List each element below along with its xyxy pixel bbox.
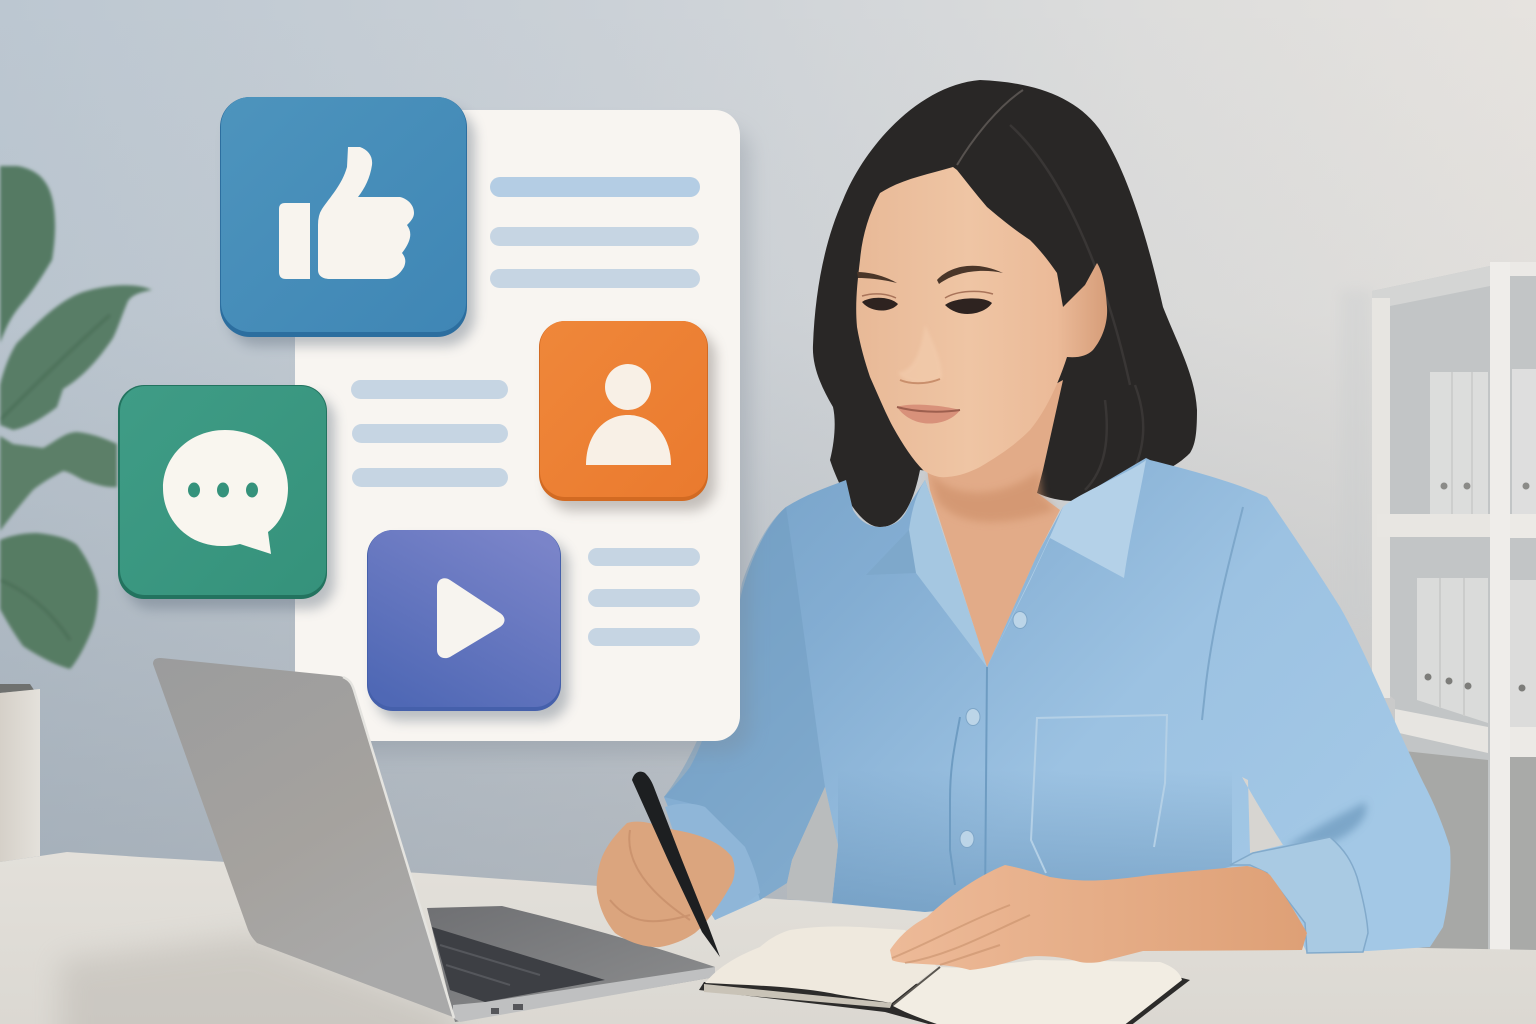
nose: [898, 325, 942, 383]
sleeve seam: [1202, 507, 1243, 720]
text lines top: [490, 177, 700, 288]
finger shading: [610, 830, 690, 921]
shirt lower shading: [832, 770, 1232, 912]
shirt pocket: [1031, 715, 1167, 873]
right sleeve fold shadow: [1285, 802, 1366, 848]
screen lid: [153, 658, 453, 1017]
plant: [0, 166, 152, 669]
placket and buttons: [950, 667, 987, 905]
binders upper: [1430, 369, 1536, 515]
page left: [705, 926, 937, 1003]
notebook: [699, 926, 1190, 1024]
shelf frame: [1372, 298, 1390, 698]
neck shadow: [928, 470, 1055, 522]
hand: on notebook with forearm: [890, 865, 1307, 970]
left sleeve shading: [664, 507, 825, 900]
page right: [893, 960, 1182, 1024]
front edge: [453, 967, 715, 1022]
desk: [0, 852, 1536, 1024]
eyelids: [862, 291, 993, 298]
shirt: body: [664, 458, 1451, 953]
right sleeve roll: [1230, 837, 1368, 953]
ports: [491, 1008, 499, 1014]
hair part: [957, 90, 1023, 165]
eyebrows: [857, 272, 897, 283]
pen: [632, 772, 720, 957]
gap left: [787, 787, 838, 903]
finger lines: [892, 905, 1030, 965]
plant pot: [0, 684, 40, 862]
panel: document card: [295, 110, 740, 741]
eyes: [862, 298, 898, 310]
shirt cuff left: [665, 804, 760, 920]
shelf unit: [1340, 262, 1536, 952]
text lines middle: [351, 380, 508, 487]
panel shadow: [310, 128, 750, 753]
icon: chat bubble: [118, 385, 335, 609]
wall gap between sleeve and torso: [1242, 777, 1283, 853]
icon: user profile: [539, 321, 716, 511]
face and ear: [856, 167, 1107, 477]
hair back: [813, 80, 1197, 527]
icon: thumbs up: [220, 97, 475, 346]
base: [427, 906, 715, 1022]
keyboard: [432, 927, 605, 1002]
icon: video play: [367, 530, 569, 721]
woman: [664, 80, 1451, 953]
hair streaks: [1010, 125, 1143, 490]
lips: [897, 405, 960, 424]
binders lower: [1417, 578, 1536, 727]
collar left wing: [866, 530, 920, 575]
cover: [699, 975, 1190, 1024]
dark gap behind torso: [1232, 775, 1250, 866]
lapel left: [909, 480, 987, 667]
text lines bottom: [588, 548, 700, 646]
hand: writing: [597, 772, 735, 957]
lid highlight: [343, 677, 454, 1018]
page block left: [704, 984, 892, 1008]
neck: [925, 380, 1063, 667]
laptop shadow on desk: [60, 935, 455, 1024]
collar right: [987, 460, 1146, 667]
laptop: [153, 658, 715, 1022]
